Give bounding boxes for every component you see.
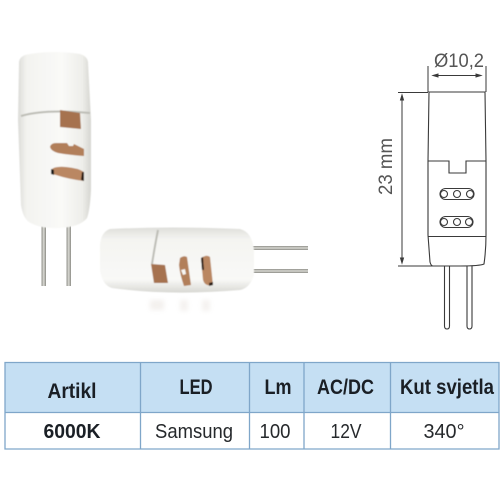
table header labels: Artikl xyxy=(48,379,96,403)
table header labels: LED xyxy=(180,375,212,399)
table grid xyxy=(5,362,499,449)
table header labels: Lm xyxy=(264,375,292,399)
table row values: Samsung xyxy=(155,421,233,443)
table header background xyxy=(6,362,498,412)
table row values xyxy=(44,421,464,443)
photo: upright LED capsule xyxy=(18,52,91,286)
dimension: diameter: Ø10,2 xyxy=(434,51,484,72)
drawing: bulb body xyxy=(428,92,486,266)
dimension: diameter xyxy=(428,51,486,92)
technical drawing: bulb outline with dimensions xyxy=(376,51,486,329)
table header labels xyxy=(48,375,495,403)
table header labels: AC/DC xyxy=(317,375,374,399)
drawing: bulb pins xyxy=(444,266,472,329)
photo: lying LED capsule xyxy=(100,228,308,311)
table row values: 100 xyxy=(260,421,290,443)
table row values: 12V xyxy=(330,421,362,443)
table row values: 340° xyxy=(424,421,464,443)
dimension: height: 23 mm xyxy=(376,138,397,195)
table body background xyxy=(6,412,498,449)
table: product specs xyxy=(5,362,499,449)
dimension: height xyxy=(376,92,433,266)
table row values: 6000K xyxy=(44,421,101,443)
